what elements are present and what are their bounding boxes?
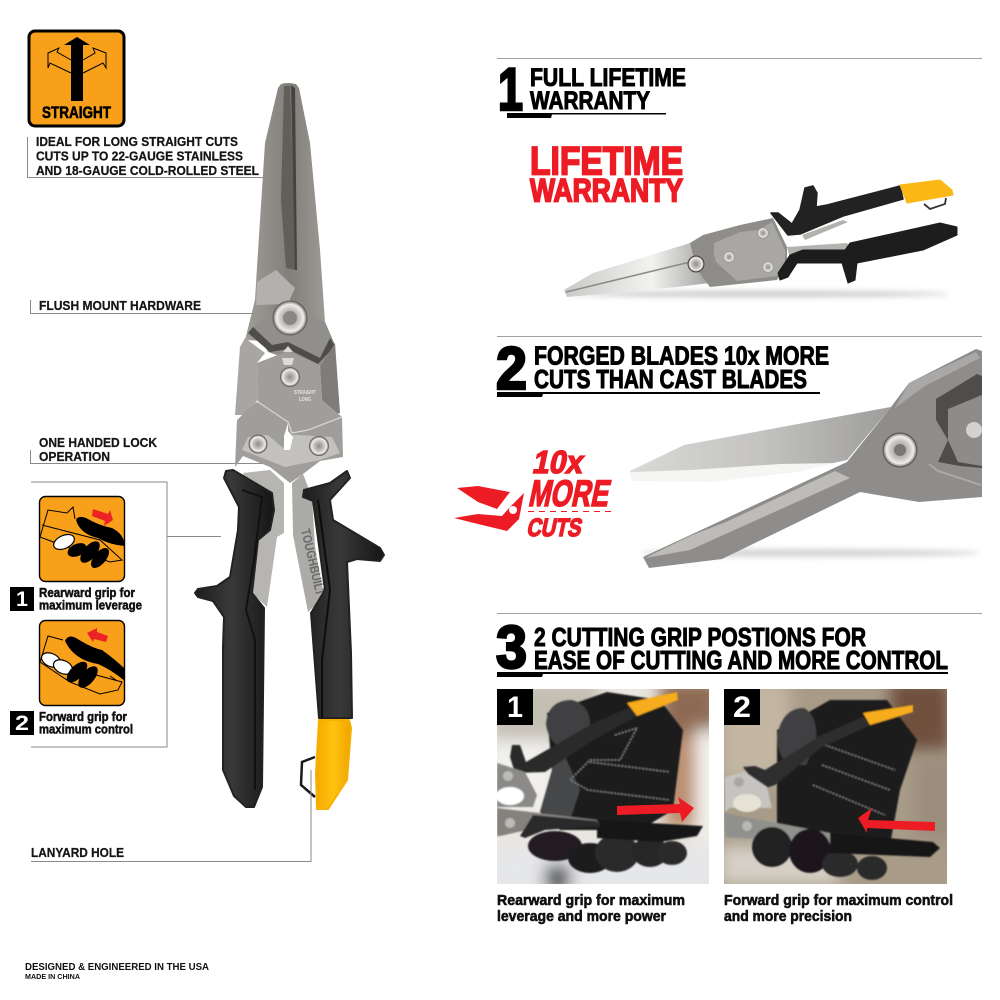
panel: lifetime warranty xyxy=(497,56,982,297)
text: forward grip: maximum control xyxy=(39,722,133,736)
heading: lifetime warranty xyxy=(498,56,686,123)
badge: 10x more cuts: MORE xyxy=(526,472,615,514)
caption: rearward grip xyxy=(497,892,685,925)
left handle xyxy=(195,470,274,807)
icon: straight cut badge xyxy=(29,31,124,126)
right tang steel xyxy=(292,474,324,612)
icon: straight cut badge: STRAIGHT xyxy=(42,104,111,122)
logo: lifetime warranty: LIFETIME xyxy=(530,140,683,184)
callout: one handed lock operation xyxy=(30,436,285,464)
text: rearward grip xyxy=(39,586,142,612)
text: brand mark: TOUGHBUILT xyxy=(298,527,328,597)
badge: number 1: 1 xyxy=(16,588,28,611)
photo: forward grip: 2 xyxy=(733,691,751,724)
text: rearward grip: maximum leverage xyxy=(39,598,142,612)
badge: 10x more cuts: 10x xyxy=(530,444,588,480)
yellow grip tip xyxy=(316,720,351,809)
footer: MADE IN CHINA xyxy=(25,972,81,981)
text: straight cut description xyxy=(28,135,282,178)
icon: rearward grip xyxy=(40,496,125,582)
logo: lifetime warranty: WARRANTY xyxy=(530,172,683,208)
heading: cutting grip positions xyxy=(496,614,948,681)
footer: DESIGNED & ENGINEERED IN THE USA xyxy=(25,962,210,973)
heading: lifetime warranty: 1 xyxy=(498,56,523,123)
caption: rearward grip: leverage and more power xyxy=(497,908,666,925)
heading: forged blades: 2 xyxy=(496,335,527,402)
badge: number 2 xyxy=(10,711,34,735)
panel: grip positions xyxy=(10,482,221,747)
callout: flush mount hardware xyxy=(30,299,272,314)
callout: flush mount hardware: FLUSH MOUNT HARDWARE xyxy=(39,299,201,313)
text: forward grip: Forward grip for xyxy=(39,710,127,724)
icon: forward grip xyxy=(39,620,126,706)
heading: cutting grip positions: 2 CUTTING GRIP POSTIONS FOR xyxy=(534,622,866,652)
callout: one handed lock operation: ONE HANDED LOCK xyxy=(39,436,157,450)
head plates: LONG xyxy=(299,397,311,403)
text: straight cut description: IDEAL FOR LONG STRAIGHT CUTS xyxy=(36,135,238,149)
heading: cutting grip positions: 3 xyxy=(496,614,527,681)
text: forward grip xyxy=(39,710,133,736)
blade xyxy=(245,83,335,345)
photo: rearward grip xyxy=(497,689,709,884)
logo: lifetime warranty xyxy=(530,140,683,208)
product: snips side view xyxy=(564,180,957,297)
heading: forged blades: FORGED BLADES 10x MORE xyxy=(534,340,829,370)
badge: number 2: 2 xyxy=(15,712,29,735)
heading: lifetime warranty: FULL LIFETIME xyxy=(530,64,686,92)
photo: rearward grip: 1 xyxy=(507,691,523,724)
text: straight cut description: CUTS UP TO 22-GAUGE STAINLESS xyxy=(36,150,243,164)
text: straight cut description: AND 18-GAUGE COLD-ROLLED STEEL xyxy=(36,164,259,178)
left tang steel xyxy=(243,470,284,607)
caption: forward grip: Forward grip for maximum control xyxy=(724,892,953,909)
heading: forged blades: CUTS THAN CAST BLADES xyxy=(534,364,807,394)
caption: forward grip: and more precision xyxy=(724,908,852,925)
right handle xyxy=(303,471,384,718)
caption: forward grip xyxy=(724,892,953,925)
badge: 10x more cuts xyxy=(454,444,621,542)
photo: forward grip xyxy=(720,680,955,885)
callout: one handed lock operation: OPERATION xyxy=(39,450,110,464)
badge: 10x more cuts: CUTS xyxy=(525,514,585,542)
badge: number 1 xyxy=(10,587,34,611)
callout: lanyard hole: LANYARD HOLE xyxy=(31,846,124,860)
panel: forged blades xyxy=(454,335,982,568)
panel: grip positions photos xyxy=(490,613,982,925)
text: rearward grip: Rearward grip for xyxy=(39,586,135,600)
lanyard hole xyxy=(301,757,315,797)
caption: rearward grip: Rearward grip for maximum xyxy=(497,892,685,909)
product: blade closeup xyxy=(630,349,982,568)
main product: long straight snips xyxy=(195,83,384,809)
head plates xyxy=(235,301,343,483)
head plates: STRAIGHT xyxy=(294,390,316,396)
heading: forged blades xyxy=(496,335,829,402)
heading: lifetime warranty: WARRANTY xyxy=(530,87,650,115)
footer xyxy=(25,962,210,981)
callout: lanyard hole xyxy=(31,770,311,862)
